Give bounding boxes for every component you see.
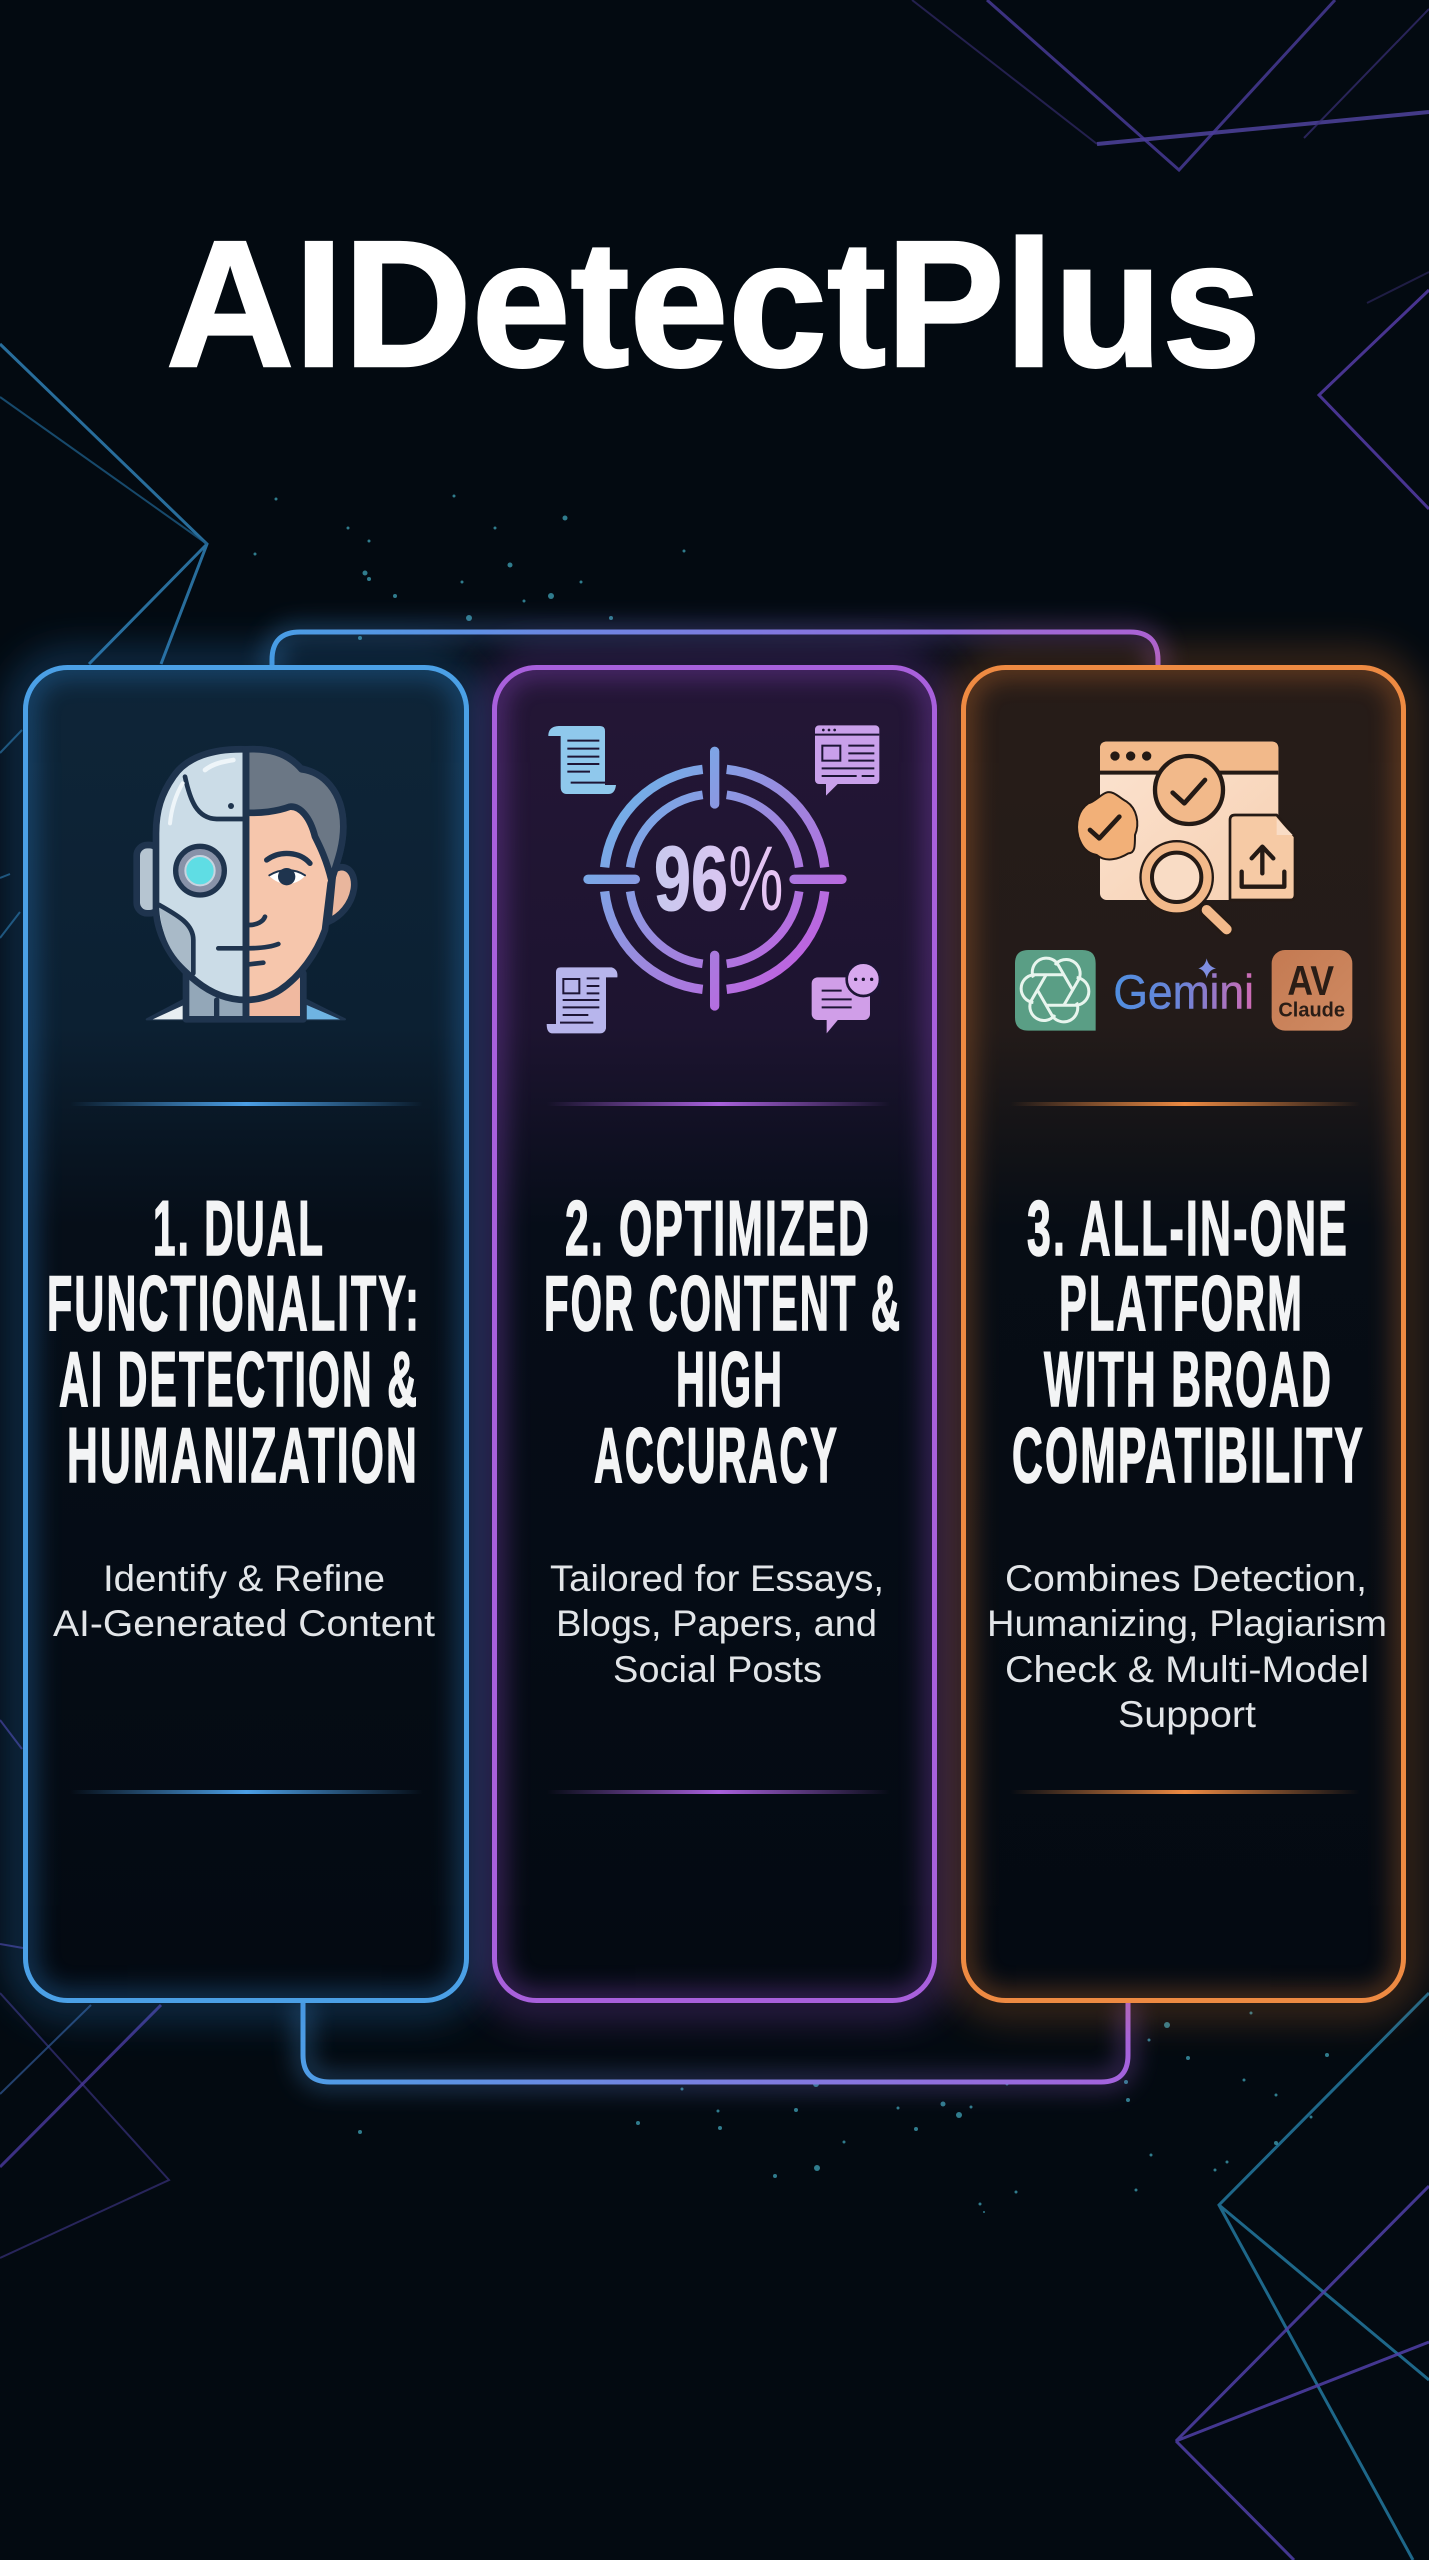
heading: dual functionality <box>47 1184 421 1499</box>
panel 1: dual functionality <box>23 665 469 2003</box>
description: combines detection: Support <box>1118 1694 1257 1735</box>
divider <box>70 1102 423 1106</box>
logo: Claude tile: AV <box>1287 958 1334 1004</box>
heading: optimized for content: 2. OPTIMIZED <box>565 1184 871 1272</box>
logo: ChatGPT knot <box>1015 950 1096 1031</box>
icon: web post bubble <box>815 725 879 796</box>
description: tailored for essays: Tailored for Essays, <box>550 1558 884 1599</box>
icon: half robot half human head <box>137 747 354 1019</box>
divider <box>1010 1102 1360 1106</box>
logo: Claude tile: Claude <box>1278 999 1345 1022</box>
description: combines detection: Combines Detection, <box>1005 1558 1367 1599</box>
description: identify and refine: AI-Generated Content <box>53 1603 436 1644</box>
icon: platform window with checks, magnifier and upload <box>1077 742 1295 929</box>
heading: optimized for content <box>544 1184 902 1499</box>
back frame: bottom connector <box>303 2000 1128 2082</box>
description: tailored for essays <box>550 1558 884 1690</box>
logos: ChatGPT, Gemini, Claude <box>1015 950 1352 1031</box>
accuracy target rings <box>588 751 842 1006</box>
heading: optimized for content: ACCURACY <box>594 1411 839 1499</box>
outer glows for cards <box>23 665 1406 2003</box>
title: AIDetectPlus <box>166 204 1261 405</box>
icon: paper document <box>547 967 617 1033</box>
logo: Gemini wordmark: Gemini <box>1113 965 1254 1019</box>
divider <box>547 1102 890 1106</box>
description: combines detection: Humanizing, Plagiarism <box>987 1603 1387 1644</box>
description: identify and refine: Identify & Refine <box>103 1558 385 1599</box>
heading: dual functionality: FUNCTIONALITY: <box>47 1259 421 1347</box>
divider <box>547 1790 890 1794</box>
heading: optimized for content: FOR CONTENT & <box>544 1259 902 1347</box>
panel 2: optimized for content <box>492 665 937 2003</box>
description: tailored for essays: Social Posts <box>613 1649 822 1690</box>
heading: dual functionality: HUMANIZATION <box>67 1411 419 1499</box>
description: tailored for essays: Blogs, Papers, and <box>556 1603 877 1644</box>
divider <box>1010 1790 1360 1794</box>
heading: optimized for content: HIGH <box>676 1335 784 1423</box>
heading: all-in-one platform <box>1012 1184 1365 1499</box>
back frame: top connector <box>272 632 1158 680</box>
divider <box>70 1790 423 1794</box>
icon: 96 percent target with document icons <box>547 725 880 1033</box>
description: combines detection <box>987 1558 1387 1735</box>
icon: scroll essay <box>548 726 616 794</box>
icon: social chat bubbles <box>812 963 880 1033</box>
96 percent value: 96 <box>654 828 728 930</box>
heading: dual functionality: 1. DUAL <box>153 1184 325 1272</box>
logo: Claude tile <box>1272 950 1352 1031</box>
description: combines detection: Check & Multi-Model <box>1005 1649 1369 1690</box>
heading: dual functionality: AI DETECTION & <box>59 1335 419 1423</box>
96 percent value: % <box>728 828 783 930</box>
particles <box>254 494 1329 2213</box>
description: identify and refine <box>53 1558 436 1644</box>
panel 3: all-in-one platform <box>961 665 1406 2003</box>
